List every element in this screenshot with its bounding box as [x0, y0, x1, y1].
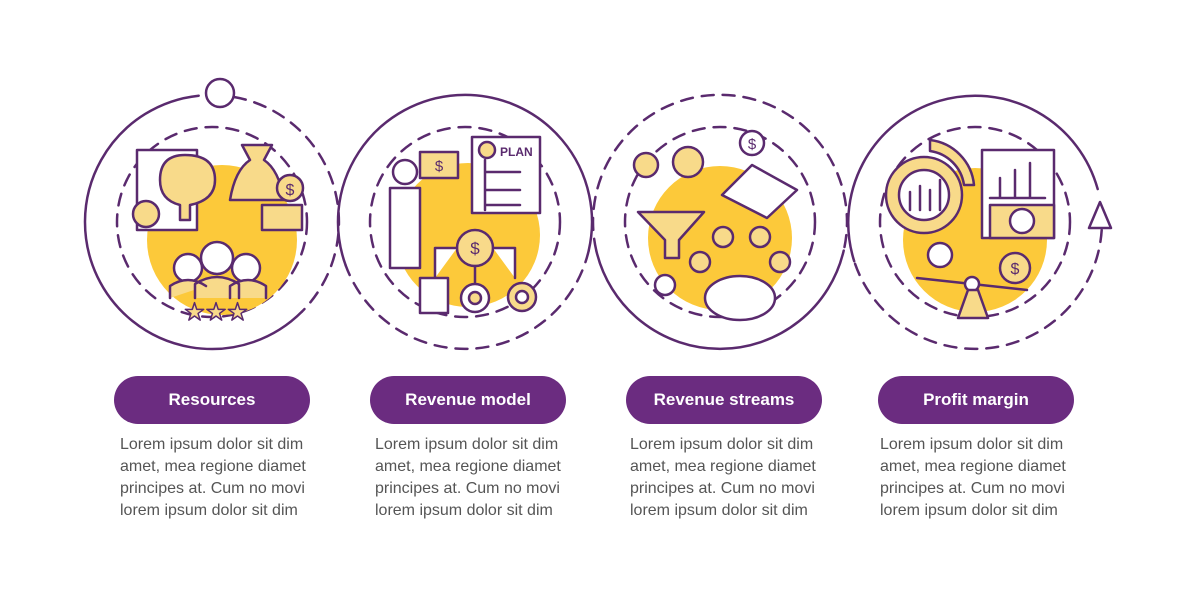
panel 2 rings [338, 95, 592, 349]
icon: revenue model: PLAN [500, 145, 533, 159]
icon: resources: ★★★ [184, 299, 248, 326]
icon: revenue streams: $ [748, 136, 757, 153]
diagram: circles [84, 78, 1112, 350]
icon: revenue model [390, 137, 540, 313]
text: resources: Lorem ipsum dolor sit dim amet, mea regione diamet principes at. Cum no movi lorem ipsum dolor sit dim [120, 436, 306, 519]
pill: Revenue streams: Revenue streams [654, 390, 794, 409]
icon: resources: $ [286, 182, 295, 199]
icon: revenue streams [634, 131, 797, 320]
pill: Revenue streams [626, 376, 822, 424]
text: revenue streams: Lorem ipsum dolor sit dim amet, mea regione diamet principes at. Cum no movi lorem ipsum dolor sit dim [630, 436, 816, 519]
icon: revenue model: $ [435, 158, 444, 175]
icon: resources [133, 145, 303, 326]
panel 3 rings [593, 95, 847, 349]
pill: Resources: Resources [169, 390, 255, 409]
pill: Profit margin: Profit margin [923, 390, 1029, 409]
pill: Profit margin [878, 376, 1074, 424]
pill: Resources [114, 376, 310, 424]
text: revenue model: Lorem ipsum dolor sit dim amet, mea regione diamet principes at. Cum no movi lorem ipsum dolor sit dim [375, 436, 561, 519]
pill: Revenue model [370, 376, 566, 424]
panel 4 rings [848, 96, 1111, 349]
pill: Revenue model: Revenue model [405, 390, 531, 409]
icon: profit margin [886, 140, 1054, 318]
panel 1 rings [85, 79, 339, 349]
icon: profit margin: $ [1011, 261, 1020, 278]
text: profit margin: Lorem ipsum dolor sit dim amet, mea regione diamet principes at. Cum no movi lorem ipsum dolor sit dim [880, 436, 1066, 519]
icon: revenue model: $ [470, 239, 480, 258]
